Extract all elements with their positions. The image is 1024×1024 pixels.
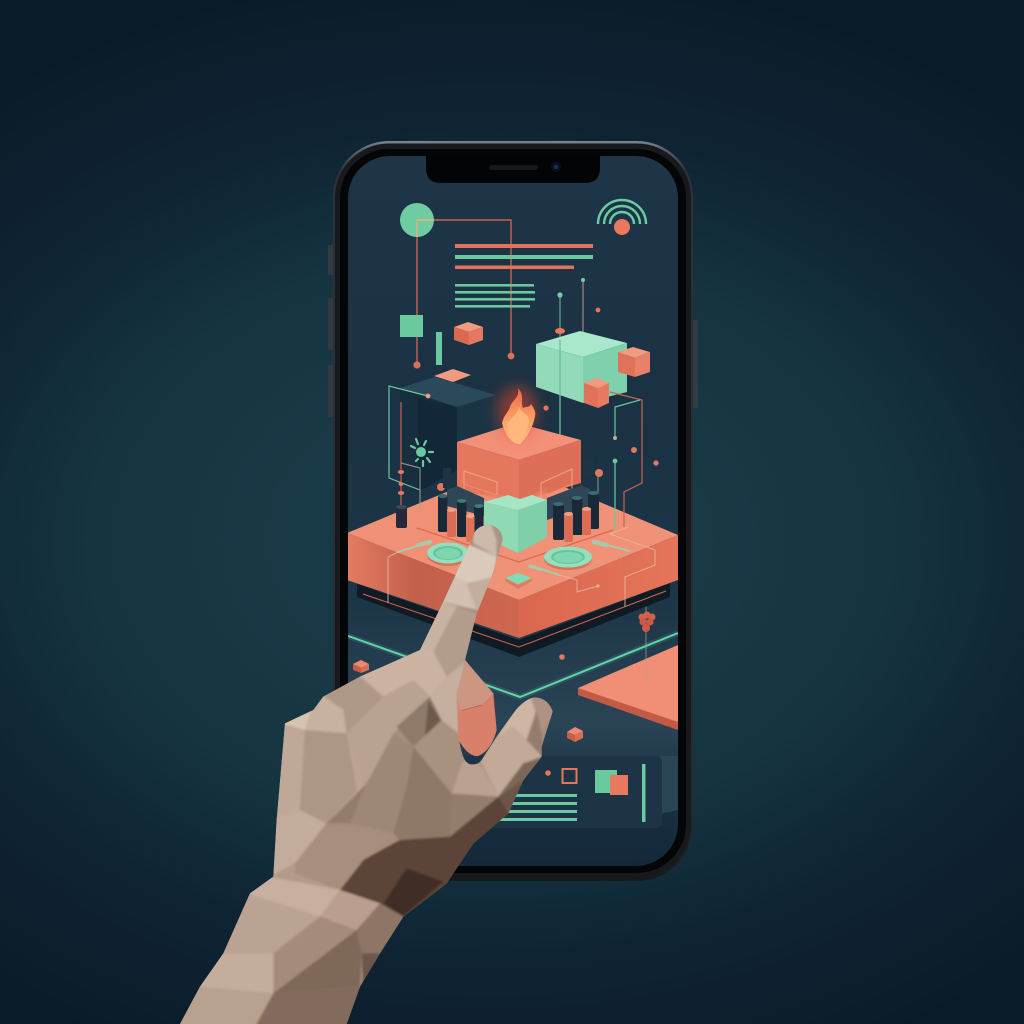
- notch: [426, 156, 600, 183]
- phone body: [333, 141, 693, 881]
- center block: [457, 427, 581, 499]
- mint center block: [484, 495, 547, 553]
- columns left: [438, 494, 484, 542]
- phone: [328, 141, 698, 881]
- hand silhouette: [173, 520, 560, 1024]
- thumb facets: [450, 695, 555, 837]
- pins: [555, 278, 600, 440]
- small floor cubes: [353, 654, 583, 742]
- lower right floor wedge: [660, 756, 678, 814]
- dark column ring: [447, 485, 590, 520]
- floating dots right: [543, 405, 659, 466]
- green square and bar: [400, 315, 442, 365]
- circuit end dots: [413, 353, 514, 369]
- dark cube: [400, 369, 496, 492]
- plates: [427, 542, 592, 570]
- wrist and forearm facets: [173, 877, 407, 1024]
- side buttons: [328, 245, 698, 417]
- circuit nodes left: [398, 394, 430, 495]
- columns right: [553, 491, 599, 542]
- flame: [497, 386, 537, 444]
- floor outline lines: [348, 633, 678, 697]
- circuit lines left: [389, 386, 428, 510]
- rear dark columns: [443, 468, 451, 488]
- platform base: [348, 488, 678, 657]
- hand: [173, 520, 560, 1024]
- floor panel: [578, 645, 678, 730]
- floating orange cube: [454, 322, 483, 345]
- lollipop markers: [437, 469, 603, 495]
- screen contents: [347, 200, 678, 828]
- screen: [348, 156, 678, 866]
- circuit lines top: [417, 220, 511, 365]
- red cluster on pole: [638, 606, 656, 680]
- knuckles and back of hand facets: [273, 647, 468, 840]
- cutlery: [398, 542, 629, 575]
- sun icon: [411, 439, 433, 466]
- upper indicator circle: [400, 203, 434, 237]
- small cubes on mint cube: [584, 347, 650, 408]
- small cylinder left: [396, 505, 407, 528]
- lower palm facets: [270, 810, 393, 890]
- middle finger: [452, 660, 497, 756]
- bottom panel: [500, 758, 662, 822]
- big mint cube: [536, 331, 627, 440]
- index finger facets: [417, 522, 507, 677]
- wifi icon: [598, 200, 646, 235]
- platform circuit lines: [388, 527, 655, 607]
- circuit lines right: [610, 392, 642, 530]
- shadow facets: [340, 797, 510, 918]
- text bars: [455, 244, 593, 308]
- small mint diamond: [505, 573, 532, 589]
- platform circuit node: [596, 584, 600, 588]
